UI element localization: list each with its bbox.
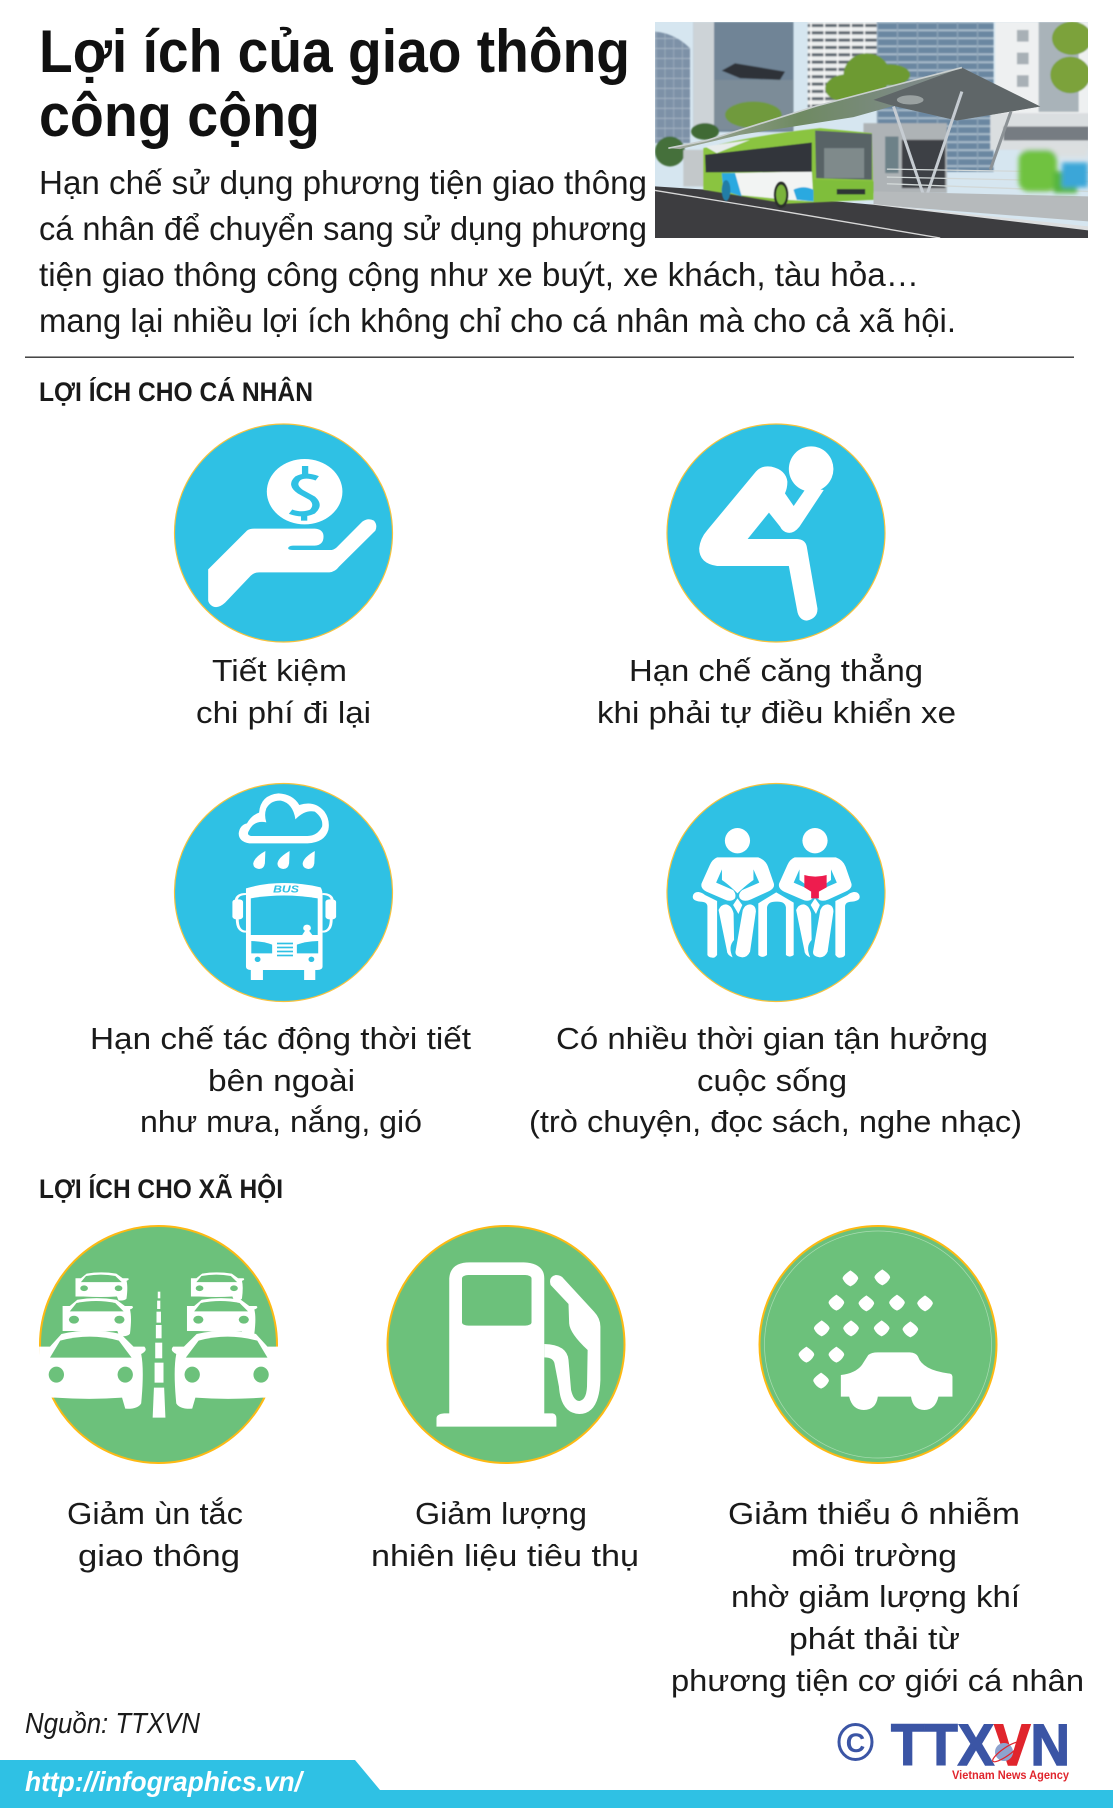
- icon: two seated passengers: [667, 784, 885, 1002]
- label: như mưa, nắng, gió: [140, 1104, 422, 1139]
- label: bên ngoài: [208, 1063, 355, 1098]
- item: saving travel cost: [174, 424, 392, 730]
- icon: hand holding coin: [174, 424, 392, 642]
- label: Hạn chế căng thẳng: [629, 652, 923, 688]
- source: Nguồn: TTXVN: [25, 1708, 200, 1740]
- item: reduce stress: [597, 424, 956, 730]
- title: Lợi ích của giao thông: [39, 18, 630, 85]
- label: [597, 652, 956, 730]
- label: giao thông: [78, 1538, 240, 1573]
- logo: TTXVN: Vietnam News Agency: [952, 1768, 1069, 1782]
- label: phát thải từ: [789, 1621, 960, 1656]
- label: [671, 1496, 1084, 1698]
- intro text: mang lại nhiều lợi ích không chỉ cho cá nhân mà cho cả xã hội.: [39, 302, 956, 339]
- icon: stressed seated person: [667, 424, 885, 642]
- logo: TTXVN: TTXVN: [891, 1713, 1070, 1778]
- heading: individual benefits: LỢI ÍCH CHO CÁ NHÂN: [39, 376, 313, 407]
- label: Hạn chế tác động thời tiết: [90, 1021, 471, 1056]
- label: nhiên liệu tiêu thụ: [371, 1538, 639, 1573]
- item: reduce congestion: [39, 1226, 278, 1573]
- label: chi phí đi lại: [196, 695, 371, 730]
- label: Giảm lượng: [415, 1496, 587, 1531]
- icon: traffic jam: [39, 1226, 278, 1463]
- label: Tiết kiệm: [212, 653, 347, 688]
- title: công cộng: [39, 82, 320, 149]
- intro text: cá nhân để chuyển sang sử dụng phương: [39, 210, 647, 247]
- label: Có nhiều thời gian tận hưởng: [556, 1021, 988, 1056]
- title: [39, 18, 630, 149]
- label: [196, 653, 371, 730]
- label: (trò chuyện, đọc sách, nghe nhạc): [529, 1104, 1022, 1139]
- intro text: tiện giao thông công cộng như xe buýt, xe khách, tàu hỏa…: [39, 256, 919, 293]
- label: cuộc sống: [697, 1063, 847, 1098]
- panel: social benefits: [39, 1173, 1084, 1698]
- label: [371, 1496, 639, 1573]
- item: reduce fuel consumption: [371, 1226, 639, 1573]
- label: [529, 1021, 1022, 1139]
- item: reduce pollution: [671, 1226, 1084, 1698]
- label: phương tiện cơ giới cá nhân: [671, 1663, 1084, 1698]
- label: [90, 1021, 471, 1139]
- icon: car with emission particles: [760, 1226, 996, 1463]
- heading: social benefits: LỢI ÍCH CHO XÃ HỘI: [39, 1173, 283, 1204]
- icon: cloud rain and bus: [174, 784, 392, 1002]
- panel: individual benefits: [39, 376, 1022, 1139]
- website url: http://infographics.vn/: [25, 1766, 305, 1797]
- item: more time to enjoy life: [529, 784, 1022, 1139]
- intro text: Hạn chế sử dụng phương tiện giao thông: [39, 164, 647, 201]
- label: khi phải tự điều khiển xe: [597, 695, 956, 730]
- label: [67, 1496, 243, 1573]
- photo: bus rapid transit station: [655, 22, 1088, 238]
- label: môi trường: [791, 1538, 957, 1573]
- icon: fuel pump: [388, 1226, 624, 1463]
- item: weather protection: [90, 784, 471, 1139]
- intro text: [39, 164, 956, 339]
- label: Giảm thiểu ô nhiễm: [728, 1496, 1020, 1531]
- footer band: [0, 1760, 1113, 1808]
- label: Giảm ùn tắc: [67, 1496, 243, 1531]
- header: [39, 18, 1092, 339]
- logo: TTXVN: C: [846, 1728, 865, 1758]
- icon: cloud rain and bus: BUS: [273, 884, 299, 895]
- label: nhờ giảm lượng khí: [731, 1579, 1020, 1614]
